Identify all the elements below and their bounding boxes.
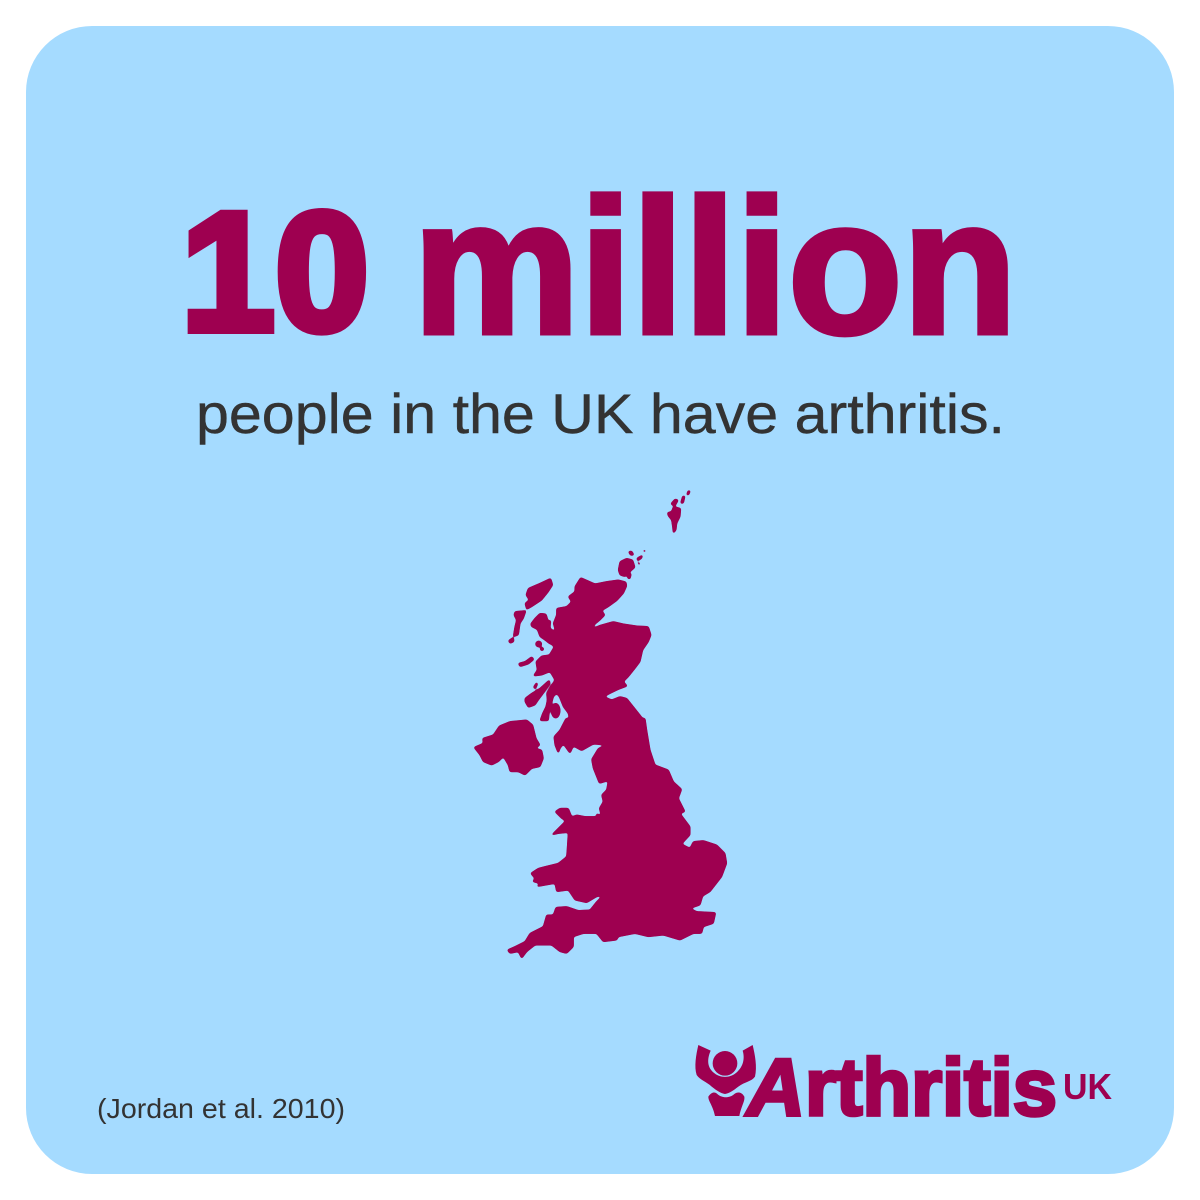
Great Britain south [507, 718, 727, 958]
heading: 10 million: million [413, 159, 1017, 374]
Outer Hebrides [508, 578, 553, 643]
Rum [536, 641, 542, 647]
icon: raised arms figure [695, 1045, 756, 1116]
heading: 10 million: 10 [181, 177, 369, 366]
Skye [531, 613, 557, 644]
Scottish mainland [533, 578, 651, 722]
subheading: people in the UK have arthritis. [196, 382, 1005, 445]
Anglesey [555, 808, 572, 822]
logo wordmark: rthritis [805, 1043, 1057, 1133]
Eigg [540, 647, 544, 651]
Northern Ireland [474, 720, 543, 775]
logo wordmark: A [745, 1043, 805, 1133]
Shetland [667, 491, 690, 533]
Orkney [618, 550, 646, 579]
Arran [551, 703, 560, 718]
citation: (Jordan et al. 2010) [97, 1093, 345, 1124]
map: United Kingdom [474, 491, 727, 958]
Islay and Jura [525, 680, 550, 707]
logo UK: UK [1063, 1066, 1112, 1107]
logo: Arthritis UK [695, 1043, 1112, 1133]
Colonsay [533, 682, 538, 689]
Coll and Tiree [518, 657, 534, 667]
